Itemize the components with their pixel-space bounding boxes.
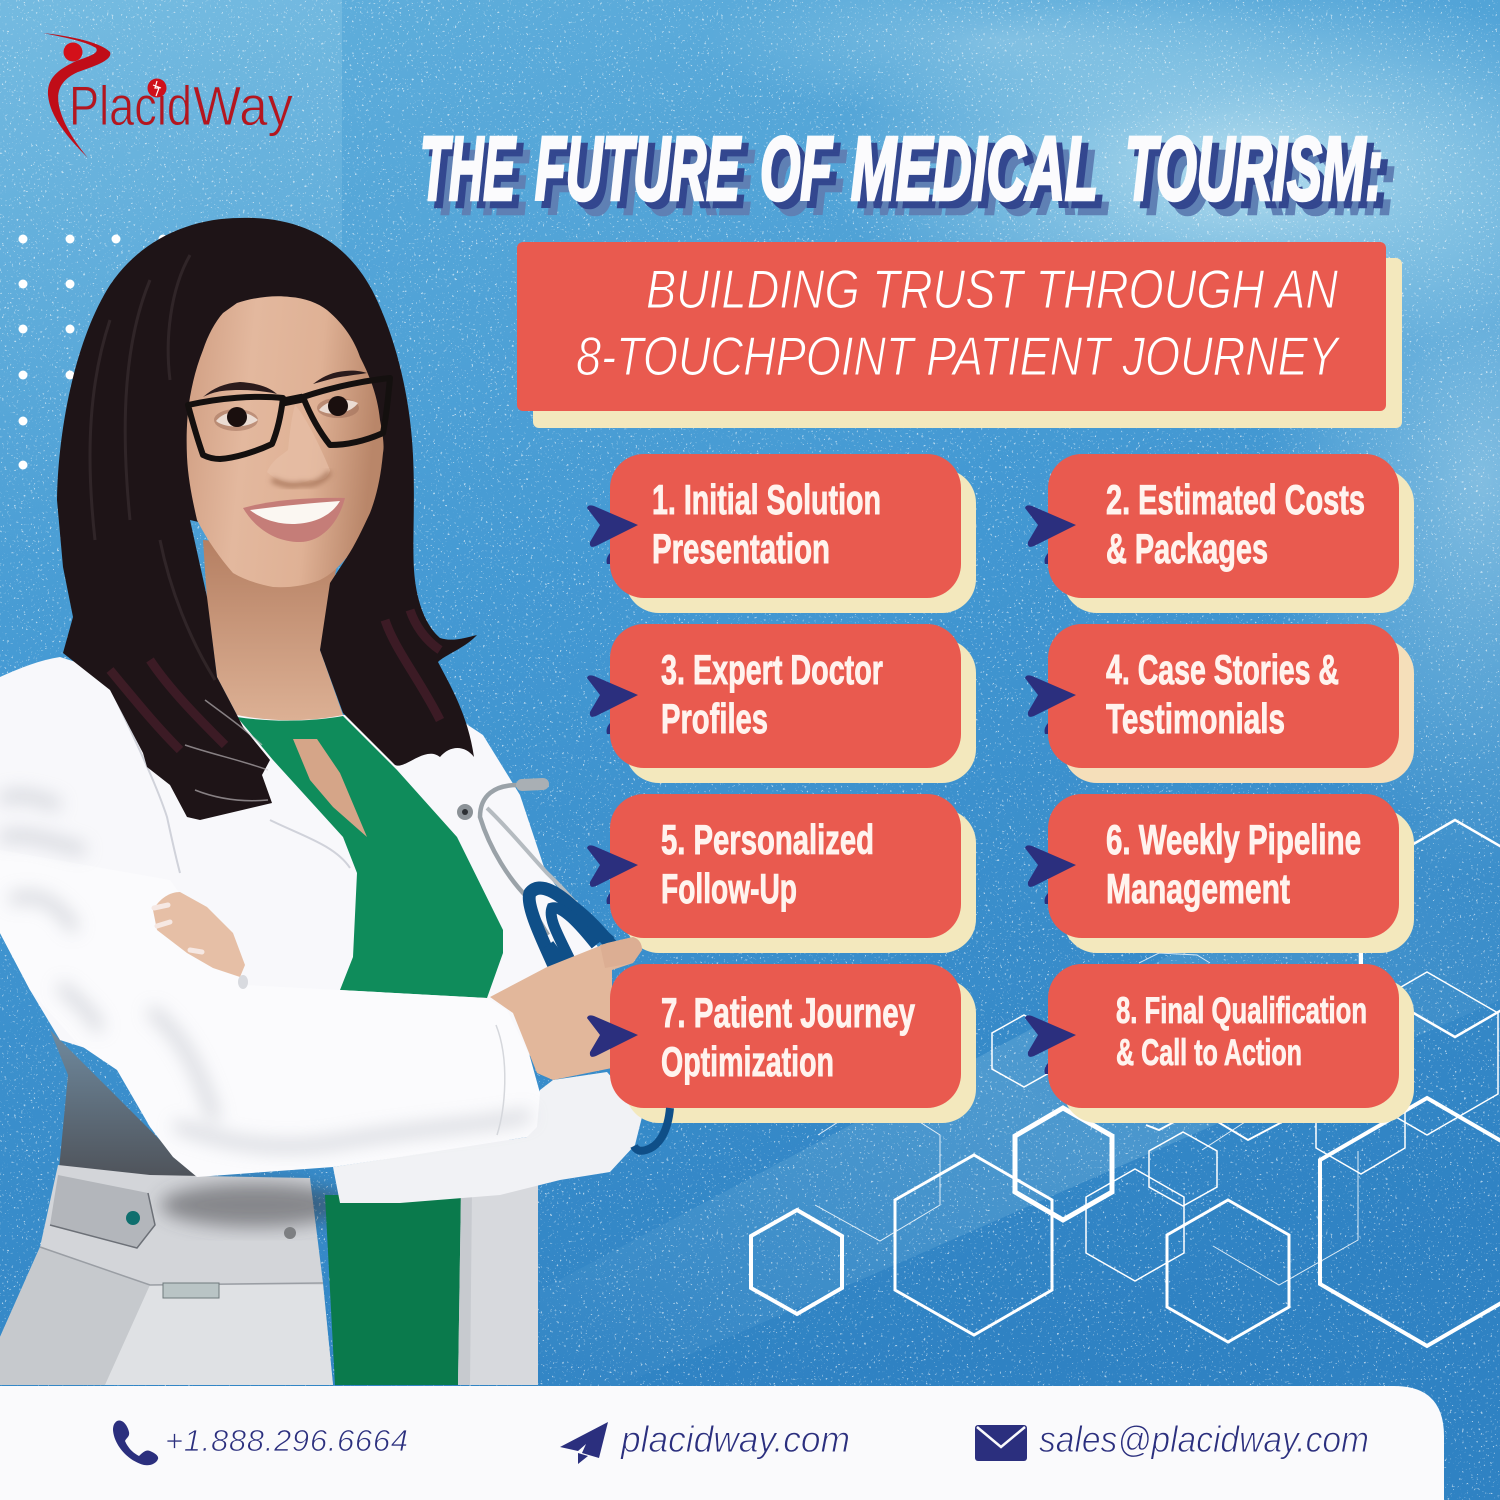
card 3: [587, 624, 976, 783]
cuff seam: [496, 1025, 505, 1135]
email: sales@placidway.com: [1039, 1419, 1369, 1460]
folded sleeve: [0, 850, 540, 1177]
card 3: Profiles: [661, 695, 768, 742]
icon: envelope: [975, 1425, 1027, 1461]
card 4: Testimonials: [1106, 695, 1285, 742]
arm fold shading: [0, 796, 530, 1146]
face: [187, 296, 384, 587]
phone number: +1.888.296.6664: [165, 1423, 408, 1458]
card 5: 5. Personalized: [661, 816, 874, 863]
title face: [420, 120, 1383, 220]
decorative dots grid: [18, 234, 168, 470]
card 7: 7. Patient Journey: [661, 989, 915, 1036]
hair: [57, 218, 477, 820]
card 8: & Call to Action: [1116, 1032, 1302, 1073]
title shadow far: [433, 134, 1396, 234]
title shadow near: FUTURE: [542, 126, 748, 226]
title face: OF: [760, 120, 833, 220]
hair highlights: [90, 255, 440, 801]
stethoscope: [457, 784, 612, 968]
title shadow far: MEDICAL: [864, 134, 1111, 234]
card 1: [587, 454, 976, 613]
title shadow near: [426, 126, 1390, 226]
hexagon network decoration: [751, 820, 1500, 1346]
title shadow far: THE: [433, 134, 530, 234]
coat upper body: [0, 657, 600, 1180]
glasses: [188, 378, 390, 459]
icon: phone: [113, 1421, 158, 1465]
subtitle text: [576, 258, 1341, 387]
title face: FUTURE: [535, 120, 742, 220]
smile: [243, 498, 345, 542]
card 2: 2. Estimated Costs: [1106, 476, 1365, 523]
subtitle text: 8-TOUCHPOINT PATIENT JOURNEY: [576, 325, 1341, 387]
card 6: [1025, 794, 1414, 953]
card 8: 8. Final Qualification: [1116, 990, 1367, 1031]
left hand fingers: [153, 892, 245, 977]
card 3: 3. Expert Doctor: [661, 646, 883, 693]
neck: [203, 540, 343, 720]
footer contact bar: [0, 1386, 1444, 1500]
card 7: [587, 964, 976, 1123]
website: placidway.com: [620, 1419, 850, 1460]
card 8: [1025, 964, 1414, 1123]
title shadow near: MEDICAL: [858, 126, 1104, 226]
blouse keyhole: [293, 739, 367, 837]
logo: PlacidWay: [43, 33, 293, 158]
card 1: 1. Initial Solution: [652, 476, 881, 523]
card 2: [1025, 454, 1414, 613]
subtitle text: BUILDING TRUST THROUGH AN: [646, 258, 1338, 320]
cuff button: [238, 975, 248, 989]
photo: smiling doctor in white coat: [0, 218, 643, 1385]
coat pocket: [163, 1283, 219, 1298]
title shadow near: OF: [766, 126, 840, 226]
card 7: Optimization: [661, 1038, 834, 1085]
green blouse: [237, 716, 503, 998]
card 6: 6. Weekly Pipeline: [1106, 816, 1361, 863]
thumb over card 5 edge: [600, 937, 642, 968]
eyebrows: [203, 371, 367, 397]
lower coat right panel: [458, 1175, 538, 1385]
card 1: Presentation: [652, 525, 830, 572]
title shadow far: OF: [773, 134, 846, 234]
card 6: Management: [1106, 865, 1290, 912]
title: [420, 120, 1396, 234]
card 5: Follow-Up: [661, 865, 797, 912]
logo: PlacidWay: Way: [193, 74, 293, 137]
icon: paper plane: [560, 1422, 608, 1464]
logo: PlacidWay: Placid: [69, 74, 192, 137]
coat collar line: [113, 693, 350, 873]
title face: MEDICAL: [851, 120, 1098, 220]
card 4: [1025, 624, 1414, 783]
lower coat left panel: [0, 1165, 350, 1385]
sleeve lower (right arm): [333, 1072, 643, 1203]
card 2: & Packages: [1106, 525, 1268, 572]
card 5: [587, 794, 976, 953]
coat buttons: [126, 1211, 472, 1262]
title shadow far: FUTURE: [548, 134, 755, 234]
title shadow near: THE: [426, 126, 523, 226]
stethoscope tube end: [634, 1108, 670, 1151]
eyes: [214, 396, 359, 431]
subtitle panel: [517, 242, 1402, 428]
nose: [267, 405, 330, 485]
forearm and hand: [490, 937, 642, 1080]
card 4: 4. Case Stories &: [1106, 646, 1339, 693]
blouse lower: [325, 1195, 463, 1385]
title face: THE: [420, 120, 517, 220]
under-arm shadowed coat: [50, 1030, 200, 1200]
